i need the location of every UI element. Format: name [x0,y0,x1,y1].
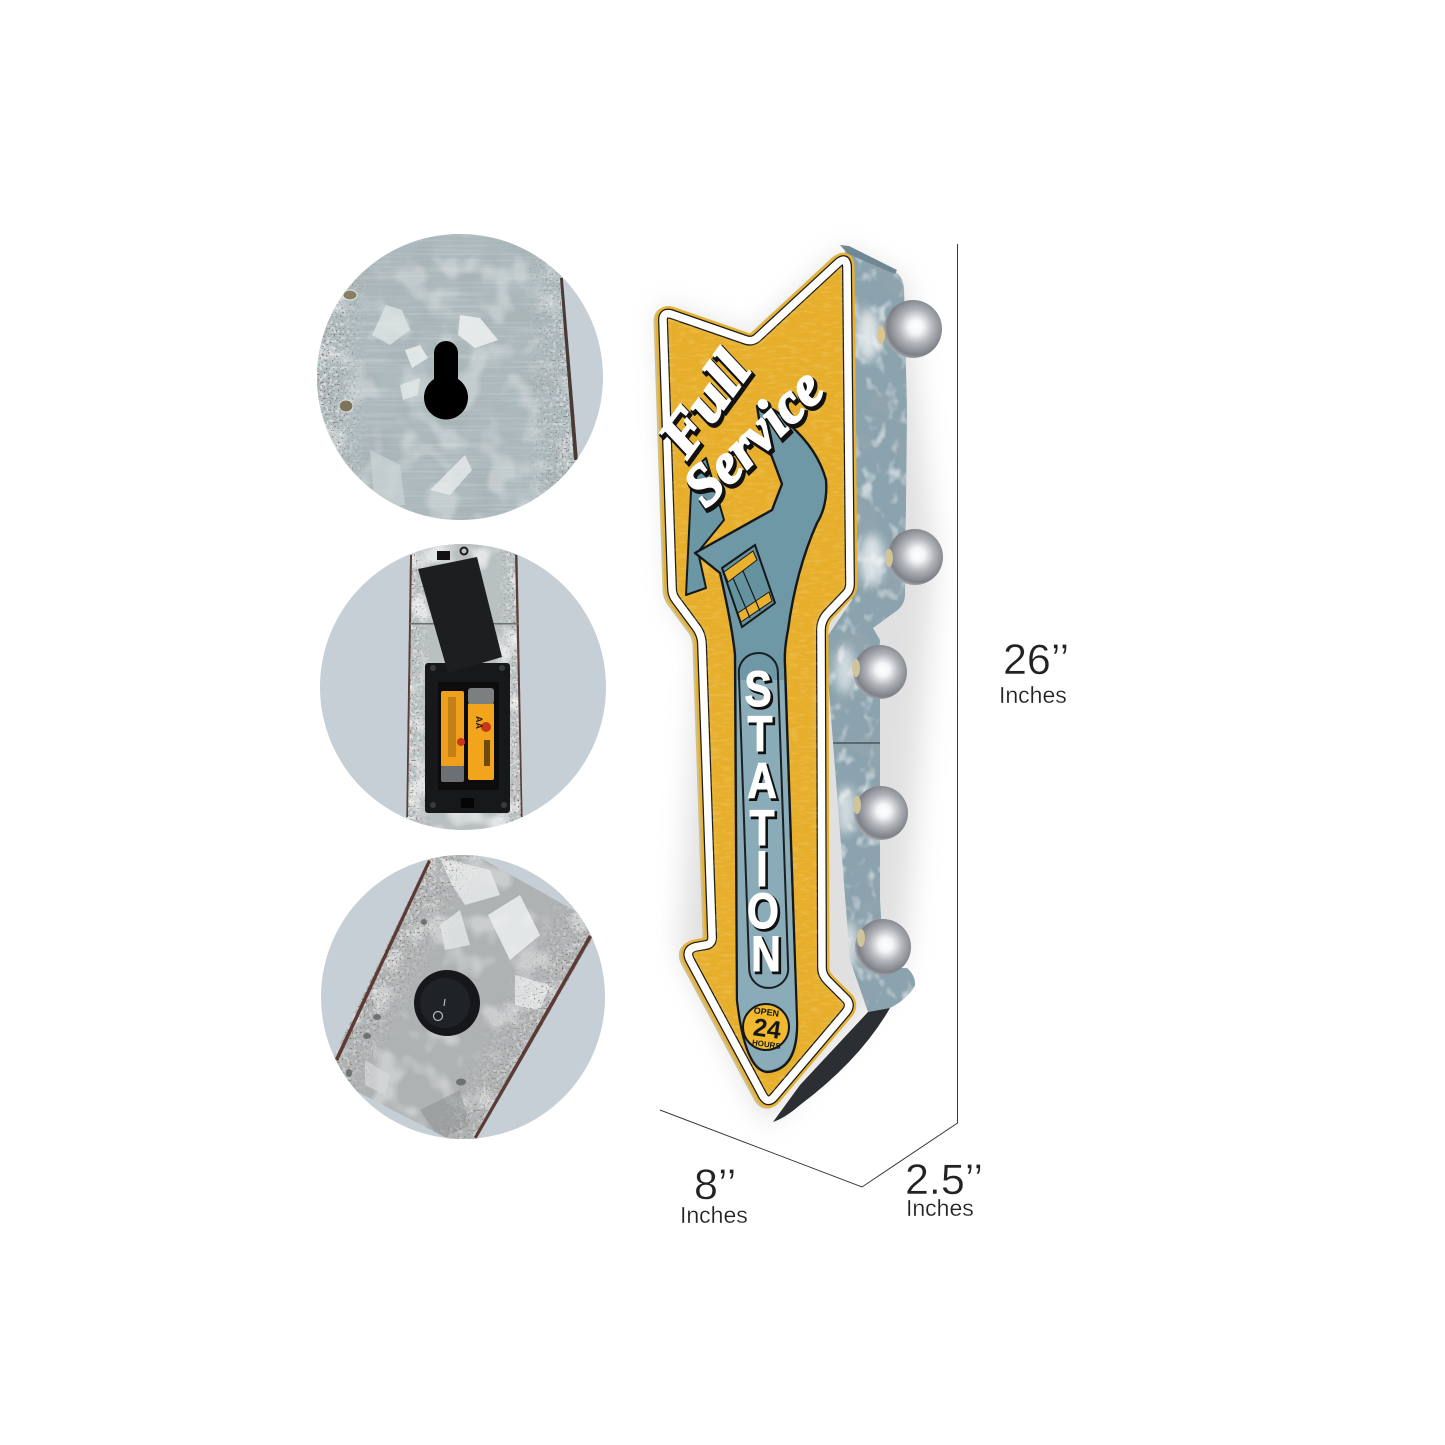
label: height 26 inches: 26’’ [1003,636,1069,684]
text: STATION shadow: N [753,928,783,984]
text: STATION shadow [746,663,783,984]
text: STATION shadow: S [746,663,774,719]
text: STATION shadow: A [749,755,779,811]
label: height 26 inches [999,636,1069,708]
label: depth 2.5 inches: Inches [906,1195,974,1221]
battery cover [418,557,502,673]
wrench upper jaw and handle [695,406,826,1072]
text: STATION shadow: I [758,843,770,899]
sign face with white border [663,260,850,1100]
panel: on-off switch detail circle [320,850,610,1145]
sign drop shadow [660,250,935,1125]
text: Full Service: Full [644,338,764,469]
text: Full Service: Service [670,355,836,518]
text: STATION: I [756,841,768,897]
adjusting rack [722,545,775,627]
badge: open 24 hours: 24 [751,1013,783,1045]
icon: rivets [346,919,466,1086]
text: STATION shadow: T [749,708,775,764]
text: Full Service: Full [646,341,766,472]
label: width 8 inches: Inches [680,1202,748,1228]
dimension lines [660,244,958,1187]
label: width 8 inches: 8’’ [694,1161,736,1209]
wrench illustration [686,406,826,1072]
icon: rocker switch [414,970,480,1036]
badge: open 24 hours: HOURS [751,1038,782,1051]
station pill outline [738,652,789,989]
wrench lower jaw [686,458,724,595]
panel: keyhole detail circle [310,225,603,535]
text: STATION shadow: O [749,885,781,941]
icon: rivet holes [339,290,357,412]
text: STATION shadow: T [751,802,777,858]
badge: open 24 hours [743,1004,789,1051]
sign edge [661,261,848,1101]
panel: battery compartment detail circle [320,535,606,835]
label: height 26 inches: Inches [999,682,1067,708]
battery tray [425,663,510,813]
side metal panel [773,245,920,1122]
text: STATION: O [747,883,779,939]
badge: open 24 hours: OPEN [753,1005,780,1019]
icon: keyhole [424,341,468,419]
text: STATION: T [747,706,773,762]
label: width 8 inches [680,1161,748,1228]
batteries: AA [474,716,484,729]
text: STATION: S [744,661,772,717]
text: STATION: T [749,800,775,856]
text: STATION: A [747,753,777,809]
label: depth 2.5 inches: 2.5’’ [905,1156,983,1204]
text: STATION [744,661,781,982]
panel: arrow sign [644,245,943,1122]
marquee light bulbs [852,300,943,975]
text: STATION: N [751,926,781,982]
batteries [441,688,494,782]
text: Full Service: Service [672,358,838,521]
